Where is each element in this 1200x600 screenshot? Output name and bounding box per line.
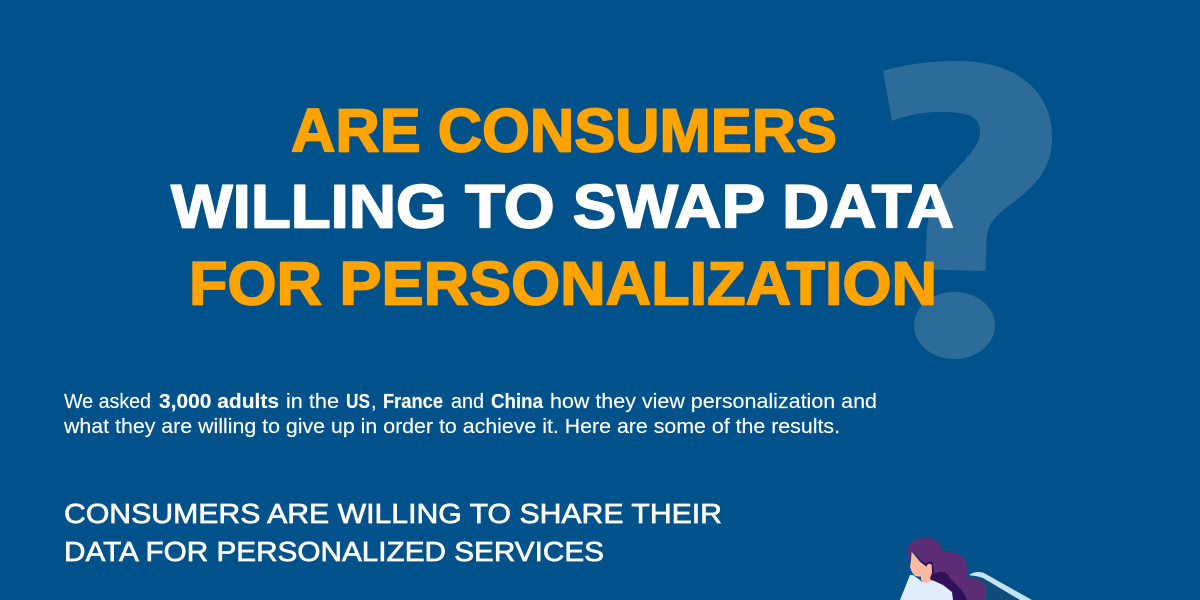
shirt [900,575,953,600]
intro text: France [383,391,443,413]
intro text [63,391,877,438]
title [171,96,954,318]
device [969,572,1032,600]
title line 1: ARE CONSUMERS [291,96,837,164]
section heading: DATA FOR PERSONALIZED SERVICES [64,536,604,567]
intro text: in the [286,391,339,413]
hair [907,538,986,600]
icon: large translucent question mark [883,61,1052,359]
intro text: 3,000 adults [159,391,279,413]
intro text: China [491,391,544,413]
title line 2: WILLING TO SWAP DATA [171,172,954,240]
intro text: , [371,391,377,413]
intro text: what they are willing to give up in order to achieve it. Here are some of the results. [63,416,840,438]
intro text: how they view personalization and [550,391,877,413]
title line 3: FOR PERSONALIZATION [189,250,937,318]
intro text: US [346,391,370,413]
hair shadow [911,549,967,600]
section heading: CONSUMERS ARE WILLING TO SHARE THEIR [64,498,722,529]
face and neck [910,552,932,585]
intro text: and [451,391,484,413]
intro text: We asked [64,391,151,413]
illustration: woman with device [900,538,1032,600]
section heading [64,498,722,567]
